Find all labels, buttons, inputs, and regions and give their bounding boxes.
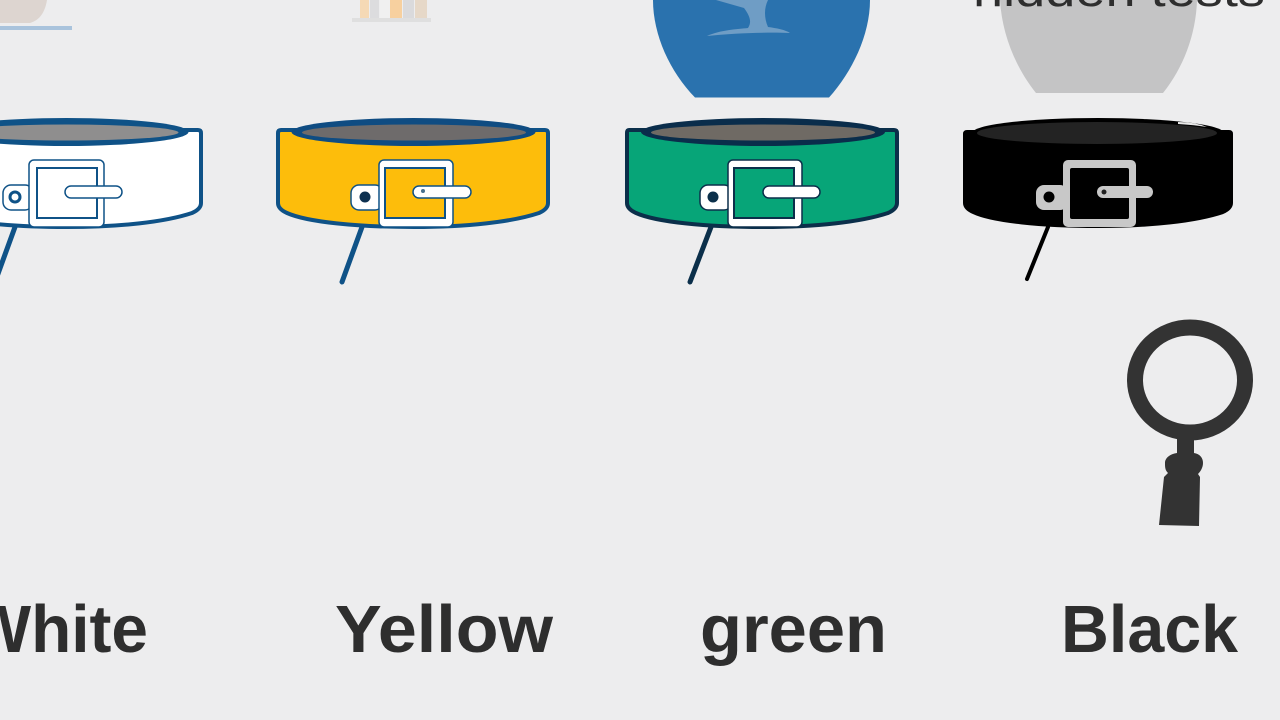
label: Yellow: Yellow bbox=[335, 592, 554, 667]
icon: magnifying glass bbox=[1135, 328, 1245, 526]
icon: faded figure above white belt bbox=[0, 0, 72, 30]
icon: black belt bbox=[964, 118, 1232, 279]
icon: blue vase with tree bbox=[653, 0, 870, 98]
icon: faded bars above yellow belt bbox=[352, 0, 431, 22]
label: green: green bbox=[700, 592, 887, 667]
label: Black: Black bbox=[1061, 592, 1239, 667]
icon: green belt bbox=[627, 118, 897, 282]
icon: grey vase bbox=[1000, 0, 1197, 93]
icon: yellow belt bbox=[278, 118, 548, 282]
icon: white belt bbox=[0, 118, 201, 282]
